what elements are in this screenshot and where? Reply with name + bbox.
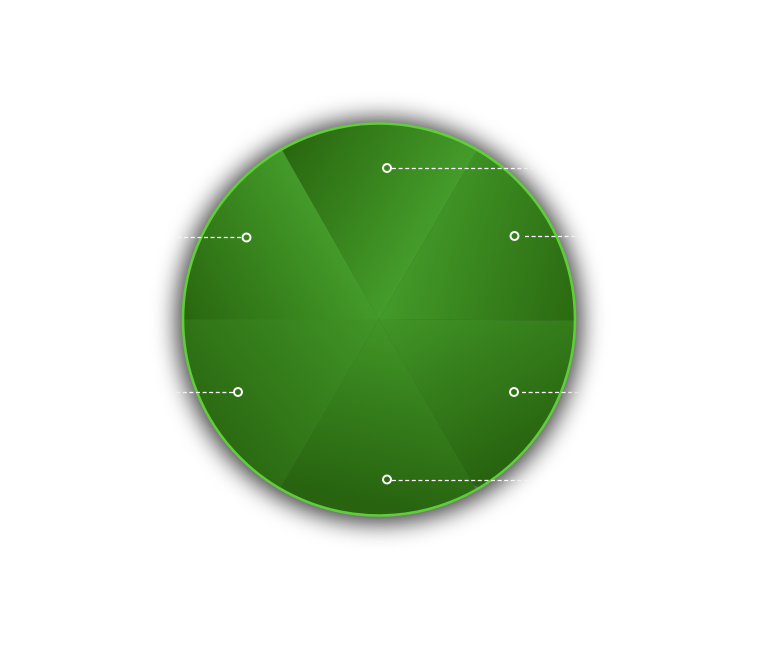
segment: upper left (184, 150, 379, 320)
callout: bottom (383, 476, 532, 484)
callout: upper left (170, 234, 250, 242)
segment: upper right (379, 151, 574, 320)
disc shadow (177, 119, 581, 523)
wheel diagram (158, 100, 600, 542)
callout: upper right (510, 232, 584, 240)
callout: lower left (170, 388, 242, 396)
callout: lower right (510, 388, 584, 396)
disc rim (183, 124, 575, 516)
segment: top (282, 124, 476, 319)
segment: lower left (184, 320, 379, 488)
segment: lower right (379, 320, 574, 487)
callout: top (383, 164, 537, 172)
disc segments (184, 124, 574, 514)
segment: bottom (281, 320, 475, 514)
